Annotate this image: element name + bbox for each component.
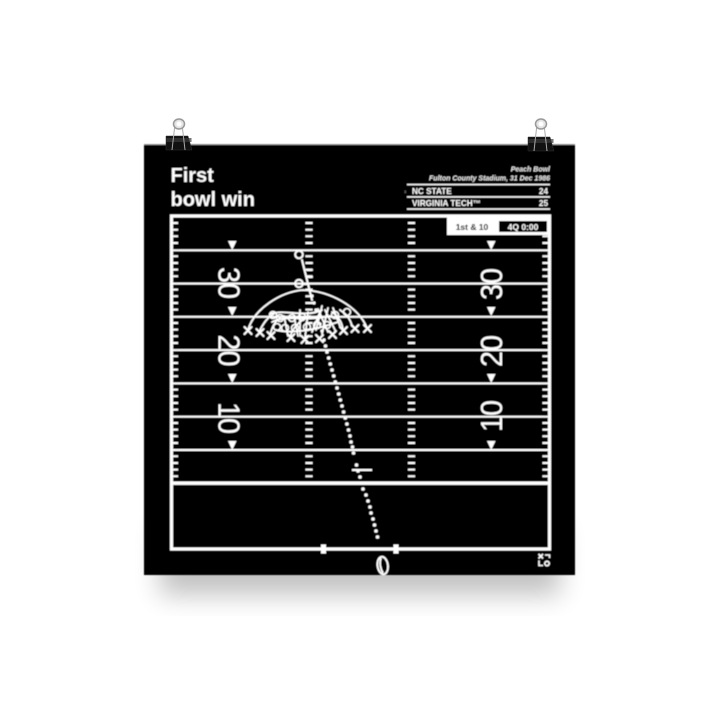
scoreboard: VIRGINIA TECH™ [412, 199, 481, 208]
poster shadow [160, 525, 560, 595]
binder clip right [528, 119, 554, 151]
receiver circles and route [295, 251, 312, 300]
hash marks [173, 223, 548, 476]
yard numbers left [212, 267, 246, 434]
yard numbers right: 10 [474, 400, 509, 432]
game info: Fulton County Stadium, 31 Dec 1986 [429, 176, 550, 182]
yard numbers right: 20 [474, 335, 509, 367]
poster panel [144, 144, 575, 575]
X markers [244, 325, 371, 343]
yard arrows [228, 241, 496, 450]
football icon [376, 556, 389, 575]
game info: Peach Bowl [511, 166, 551, 174]
down and distance badge [447, 217, 550, 235]
scoreboard: 3 [404, 189, 407, 194]
ball path dots [310, 294, 379, 539]
down and distance badge: 1st & 10 [456, 222, 489, 232]
yard lines [172, 249, 549, 451]
yard numbers right [474, 268, 509, 432]
scoreboard: NC STATE [412, 187, 452, 196]
yard numbers left: 10 [212, 402, 246, 434]
tackle marker [352, 469, 372, 471]
yard numbers right: 30 [474, 268, 509, 300]
scoreboard [404, 184, 550, 210]
end zone goal post markers [321, 544, 398, 554]
down and distance badge: 4Q 0:00 [508, 222, 539, 232]
yard numbers left: 30 [212, 267, 246, 299]
binder clip left [166, 119, 192, 150]
title [170, 165, 255, 211]
play diagram [244, 251, 371, 343]
blocker arcs and tangled routes [248, 290, 367, 338]
defenders circles [270, 308, 350, 332]
scoreboard: 25 [539, 199, 548, 208]
title: bowl win [170, 189, 255, 211]
football field [171, 216, 550, 554]
scoreboard: 24 [539, 187, 548, 196]
yard numbers left: 20 [212, 334, 246, 366]
brand logo icon [538, 554, 550, 566]
goal line [171, 482, 550, 485]
game info [429, 166, 551, 182]
title: First [170, 165, 214, 187]
field boundary [172, 216, 550, 549]
